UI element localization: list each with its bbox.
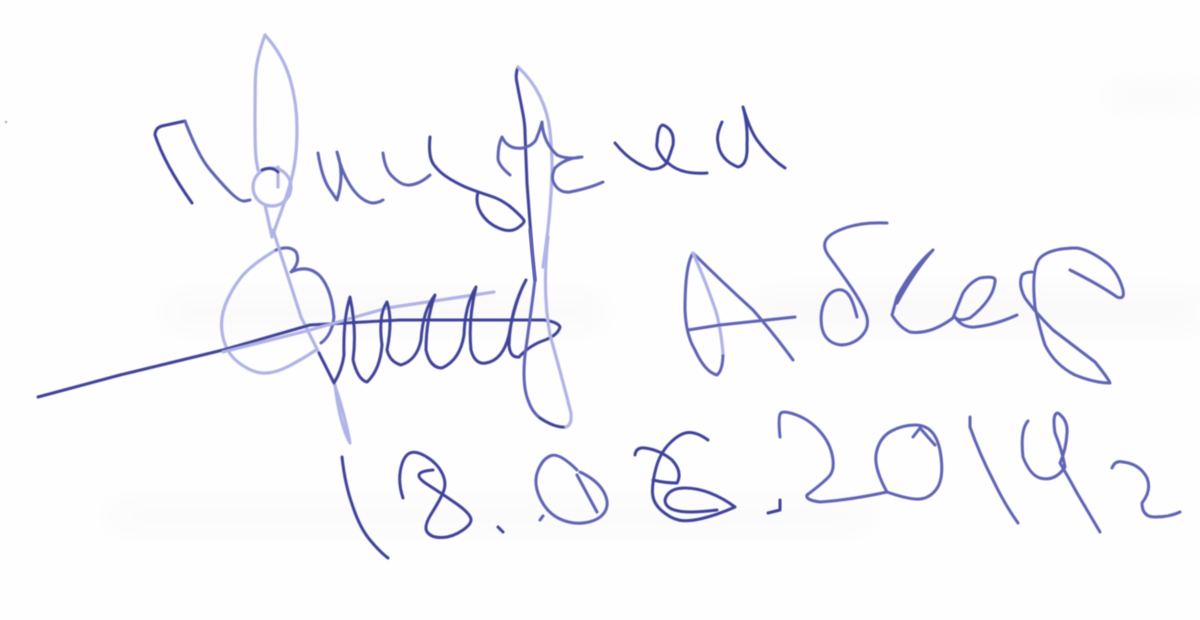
line one: handwritten word	[155, 35, 785, 280]
large pale circle	[222, 250, 316, 373]
specks	[4, 120, 8, 124]
date: 18.06.2014г	[342, 412, 1180, 558]
transcription of the handwriting as text	[160, 155, 802, 529]
surname: Абкер	[685, 223, 1123, 383]
line two: crossed signature scribble	[38, 230, 571, 443]
second tall loop	[516, 67, 552, 280]
transcription of the handwriting as text: Абкер	[690, 305, 802, 349]
transcription of the handwriting as text: 18.06.2014г	[345, 485, 560, 529]
transcription of the handwriting as text: Пациентка	[160, 155, 360, 199]
tall pale loop	[253, 35, 297, 237]
